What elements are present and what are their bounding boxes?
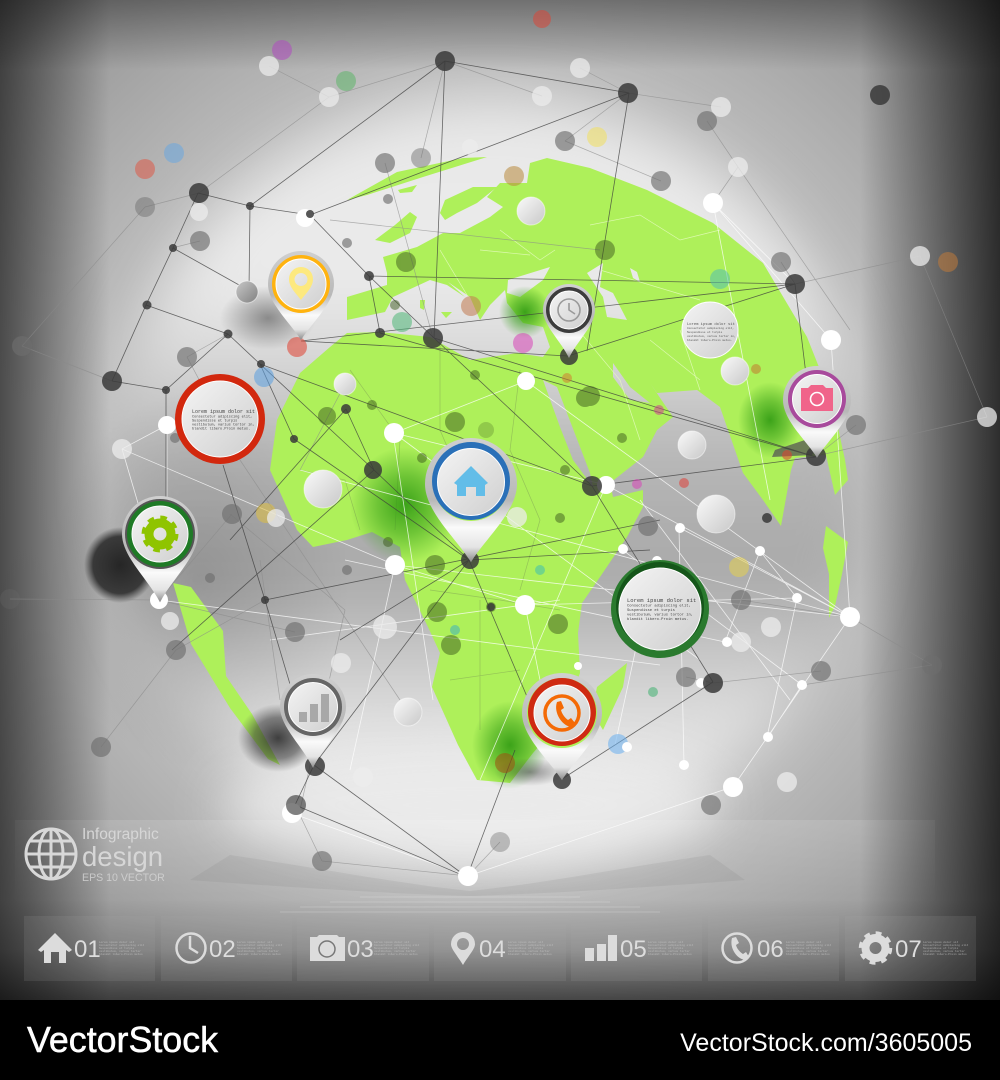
network: light grey lines (10, 61, 987, 876)
network: light grey nodes (112, 56, 997, 792)
pin shadows (84, 286, 815, 789)
number 02: 02 (209, 936, 236, 963)
small text: Consectetur adipiscing elit (237, 943, 283, 947)
network: dark lines (112, 61, 816, 877)
footer bar (0, 1000, 1000, 1080)
small text (374, 940, 420, 956)
callout text: Lorem ipsum dolor sit (627, 597, 696, 604)
small text: Suspendisse et turpis (648, 946, 684, 950)
callout text: Lorem ipsum dolor sit (687, 322, 735, 327)
logo text (82, 826, 165, 884)
small text: vestibulum, varius tortor (923, 949, 965, 953)
icon: gear (862, 934, 890, 962)
small text: Lorem ipsum dolor sit (374, 940, 410, 944)
icon: phone (545, 696, 579, 730)
map: Iceland (398, 185, 417, 193)
small text: blandit libero.Proin metus (374, 952, 418, 956)
small text (508, 940, 554, 956)
icon: house (454, 466, 488, 496)
small text: Consectetur adipiscing elit (648, 943, 694, 947)
network: translucent colour nodes (135, 10, 958, 773)
map: Sumatra (823, 526, 848, 618)
shaded spheres (236, 197, 749, 726)
small text (786, 940, 832, 956)
small text: Lorem ipsum dolor sit (508, 940, 544, 944)
logo text: design (82, 841, 163, 872)
panel 04: location (434, 916, 566, 981)
pin: location yellow (268, 251, 334, 340)
small text: Consectetur adipiscing elit (99, 943, 145, 947)
callout text: blandit libero.Proin metus. (192, 426, 250, 432)
icon: clock (558, 299, 580, 321)
callout text (192, 409, 255, 432)
callout text: Suspendisse et turpis (192, 418, 237, 424)
small text: Suspendisse et turpis (237, 946, 273, 950)
logo text: EPS 10 VECTOR (82, 872, 165, 884)
small text: Lorem ipsum dolor sit (786, 940, 822, 944)
panel 02: clock (161, 916, 292, 981)
map: borders (300, 340, 560, 730)
small text: Lorem ipsum dolor sit (923, 940, 959, 944)
callout text: vestibulum, varius tortor in, (687, 334, 736, 338)
network: dark nodes (102, 51, 890, 815)
small text: Consectetur adipiscing elit (374, 943, 420, 947)
network: grey nodes (0, 111, 942, 871)
network: white nodes (150, 193, 860, 886)
number 01: 01 (74, 936, 101, 963)
callout text: Consectetur adipiscing elit, (192, 414, 252, 420)
pin: bar chart (280, 674, 346, 768)
number 04: 04 (479, 936, 506, 963)
pin: gear (122, 496, 198, 602)
panel 01: home (24, 916, 155, 981)
icon: camera (801, 385, 833, 411)
small text: Suspendisse et turpis (374, 946, 410, 950)
small text (923, 940, 969, 956)
pin: clock (543, 284, 595, 358)
logo text: Infographic (82, 826, 159, 843)
small text: vestibulum, varius tortor (648, 949, 690, 953)
icon: location marker (289, 267, 313, 300)
logo: Infographic design (26, 826, 165, 884)
small text: Suspendisse et turpis (923, 946, 959, 950)
small text: Consectetur adipiscing elit (786, 943, 832, 947)
icon: bars (585, 935, 617, 961)
map: Mediterranean islands (420, 300, 452, 318)
small text: Suspendisse et turpis (99, 946, 135, 950)
callout: green circle (611, 560, 709, 658)
network: translucent nodes on map (318, 240, 627, 655)
small text: Lorem ipsum dolor sit (99, 940, 135, 944)
icon: bars (299, 694, 329, 722)
small text: blandit libero.Proin metus (786, 952, 830, 956)
pin: phone (522, 673, 602, 780)
callout text: Consectetur adipiscing elit, (627, 604, 691, 608)
small text: blandit libero.Proin metus (508, 952, 552, 956)
small text: Consectetur adipiscing elit (508, 943, 554, 947)
panel 03: camera (297, 916, 429, 981)
small text: vestibulum, varius tortor (508, 949, 550, 953)
number 03: 03 (347, 936, 374, 963)
network: white lines (122, 203, 850, 876)
callout text (627, 597, 696, 622)
icon: globe (26, 828, 76, 880)
icon: phone (722, 934, 752, 962)
callout text: Lorem ipsum dolor sit (192, 409, 255, 415)
number 05: 05 (620, 936, 647, 963)
callout text: Consectetur adipiscing elit, (687, 326, 734, 330)
callout text: vestibulum, varius tortor in, (627, 612, 693, 618)
icon: camera (310, 935, 345, 961)
panel 05: bars (571, 916, 702, 981)
callout text: Suspendisse et turpis (687, 330, 723, 334)
map: Greenland strip (347, 157, 487, 200)
map: Scandinavia (440, 187, 497, 220)
icon: gear (144, 518, 176, 550)
icon: clock (176, 934, 206, 962)
number 07: 07 (895, 936, 922, 963)
pin: home (425, 438, 517, 562)
wave reflection band (190, 855, 745, 912)
icon: home (38, 933, 72, 963)
small text: blandit libero.Proin metus (99, 952, 143, 956)
map: Madagascar (592, 663, 627, 730)
callout text: Suspendisse et turpis (627, 608, 675, 613)
small text: Suspendisse et turpis (786, 946, 822, 950)
small text (99, 940, 145, 956)
callout text: blandit libero.Proin metus. (687, 338, 732, 342)
small text: vestibulum, varius tortor (237, 949, 279, 953)
map: South America (173, 583, 280, 765)
small text: vestibulum, varius tortor (99, 949, 141, 953)
callout text: vestibulum, varius tortor in, (192, 422, 255, 428)
callout: red circle (175, 374, 265, 464)
number 06: 06 (757, 936, 784, 963)
panel 07: gear (845, 916, 976, 981)
small text: vestibulum, varius tortor (374, 949, 416, 953)
pin: camera (783, 366, 851, 458)
small text: Consectetur adipiscing elit (923, 943, 969, 947)
callout text (687, 322, 736, 342)
small text (648, 940, 694, 956)
map: Britain (375, 212, 417, 243)
map: Eurasia and Africa (270, 158, 848, 783)
small text: blandit libero.Proin metus (648, 952, 692, 956)
small text: blandit libero.Proin metus (237, 952, 281, 956)
callout text: blandit libero.Proin metus. (627, 617, 689, 622)
world map (173, 157, 848, 783)
small text: blandit libero.Proin metus (923, 952, 967, 956)
icon: location (451, 932, 475, 965)
small text: Lorem ipsum dolor sit (237, 940, 273, 944)
small text: Suspendisse et turpis (508, 946, 544, 950)
small text: Lorem ipsum dolor sit (648, 940, 684, 944)
footer brand: VectorStock (27, 1020, 218, 1060)
small text (237, 940, 283, 956)
footer url: VectorStock.com/3605005 (680, 1029, 972, 1057)
panel 06: phone (708, 916, 839, 981)
callout: plain circle (682, 302, 738, 358)
small text: vestibulum, varius tortor (786, 949, 828, 953)
